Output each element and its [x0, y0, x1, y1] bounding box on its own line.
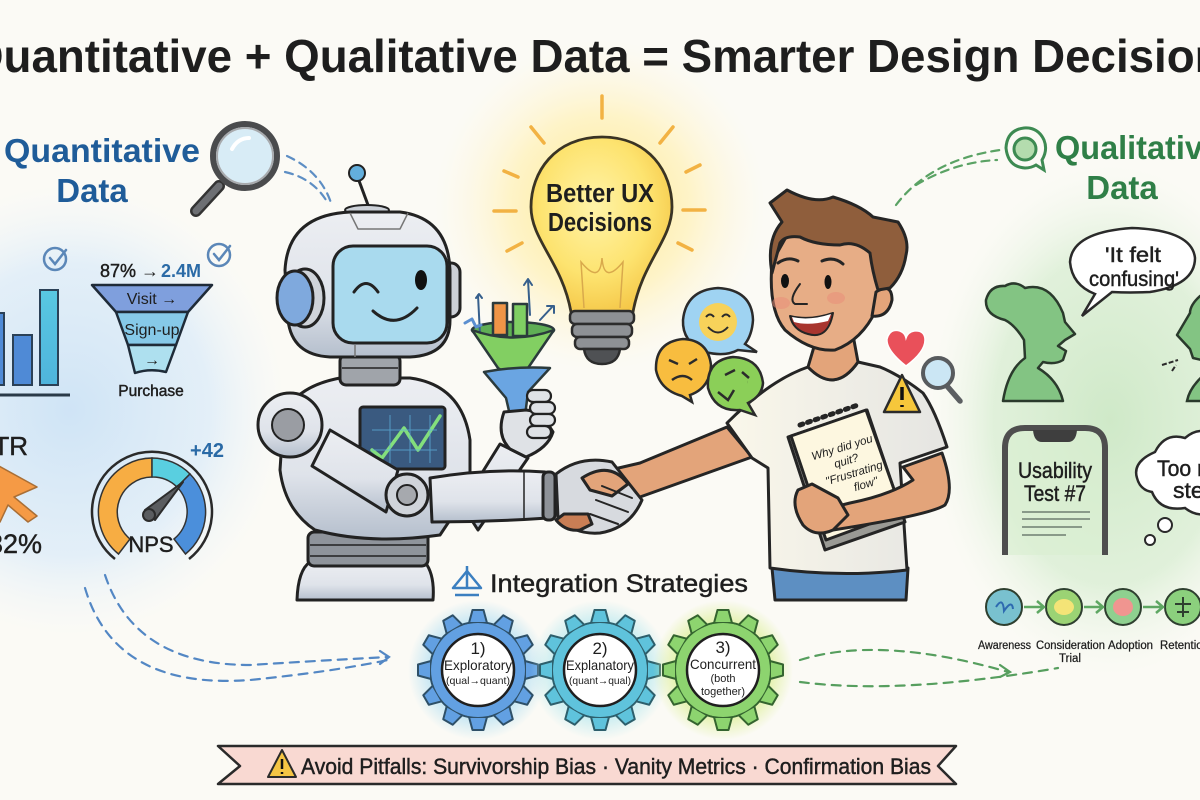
NPS gauge: +42: [190, 440, 224, 462]
icon: heart: [887, 330, 925, 366]
arrow: integration to qualitative: [800, 650, 1058, 686]
robot: [258, 165, 555, 600]
gear 3: concurrent: (both: [710, 673, 736, 685]
phone: usability test: Usability: [1018, 458, 1092, 483]
background glows: [0, 40, 1200, 675]
heading: qualitative data: Data: [1086, 169, 1158, 206]
light bulb: [494, 96, 705, 364]
icon: small magnifier: [923, 358, 960, 401]
heading: quantitative data: Quantitative: [4, 132, 200, 169]
robot face screen: [333, 246, 447, 343]
robot elbow: [386, 474, 428, 516]
silhouette: man shoulder: [1187, 370, 1200, 401]
gear 2: explanatory: (quant→qual): [569, 675, 631, 687]
icon: orange cursor: [0, 460, 37, 522]
bubble: happy: [683, 288, 757, 354]
journey labels: Adoption: [1108, 640, 1153, 652]
thought bubble: too many steps: [1136, 431, 1200, 545]
jeans: [772, 568, 908, 600]
gear 1: exploratory: Exploratory: [444, 657, 512, 673]
NPS gauge: [92, 440, 224, 559]
robot forearm: [430, 471, 555, 522]
heading: qualitative data: [1055, 129, 1200, 206]
speech bubble: it felt confusing: 'It felt: [1105, 244, 1161, 267]
person neck: [808, 335, 858, 380]
bulb label: Decisions: [548, 209, 652, 237]
journey arrows: [1024, 601, 1163, 613]
notebook: [788, 405, 905, 550]
robot gripping hand: [501, 390, 555, 457]
icon: magnifying glass: [196, 124, 277, 211]
banner: avoid pitfalls: [218, 746, 956, 784]
gear 1: exploratory: [408, 600, 548, 740]
journey icons: [986, 589, 1200, 625]
panel: quantitative data: [0, 124, 277, 559]
silhouette: woman: [986, 283, 1075, 401]
handshake: [556, 460, 642, 533]
phone: usability test: [1005, 428, 1105, 555]
journey labels: Consideration: [1036, 640, 1105, 652]
banner: avoid pitfalls: Avoid Pitfalls: Survivorship Bias · Vanity Metrics · Confirmation Bias: [301, 754, 931, 779]
bulb base: [570, 311, 634, 364]
heading: quantitative data: [4, 132, 200, 209]
funnel metric label: 87%: [100, 261, 136, 281]
funnel chart: Visit →: [127, 291, 177, 308]
robot left ear: [277, 269, 324, 327]
gear 2: explanatory: Explanatory: [566, 657, 634, 673]
funnel metric label: 2.4M: [161, 261, 201, 281]
robot lower body: [297, 562, 433, 600]
gear 3: concurrent: together): [701, 686, 745, 698]
funnel label: purchase: Purchase: [118, 383, 184, 400]
speech bubble: it felt confusing: confusing': [1089, 268, 1179, 291]
bulb filament: [581, 258, 623, 308]
robot torso: [280, 378, 470, 539]
robot waist: [308, 532, 428, 566]
heading: integration strategies: Integration Strategies: [490, 570, 748, 598]
person face features: [772, 259, 845, 335]
journey labels: Awareness: [978, 640, 1031, 652]
gear 1: exploratory: (qual→quant): [446, 675, 510, 687]
funnel chart: →: [144, 352, 160, 369]
NPS gauge: NPS: [128, 532, 174, 557]
gear 3: concurrent: Concurrent: [690, 656, 756, 672]
robot upper arm: [312, 430, 398, 512]
blue funnel: [484, 368, 550, 424]
robot antenna: [345, 165, 389, 215]
arrow: magnifier to robot: [285, 156, 332, 206]
person ear: [872, 288, 892, 316]
gear 3: concurrent: 3): [715, 638, 731, 657]
notebook: "Frustrating: [824, 459, 885, 488]
person extended arm: [610, 427, 752, 505]
bulb label: Better UX: [546, 180, 654, 208]
icon: balance: [453, 566, 481, 595]
person head: [771, 230, 880, 350]
person hand on notebook: [795, 484, 848, 533]
gear 2: explanatory: [530, 600, 670, 740]
person: [556, 190, 949, 600]
notebook: Why did you: [810, 433, 875, 463]
robot head: [285, 212, 450, 357]
icon: chat bubble: [1006, 128, 1046, 170]
funnel chart: Sign-up: [124, 322, 180, 339]
bubble: green face: [708, 357, 763, 415]
bulb glass: [531, 137, 672, 312]
bubble: frustrated: [656, 339, 711, 402]
green funnel back rim: [472, 322, 554, 338]
gear 1: exploratory: 1): [470, 639, 486, 658]
phone: usability test: Test #7: [1024, 481, 1086, 506]
person hair: [770, 190, 907, 290]
gear 3: concurrent: [653, 600, 793, 740]
robot chest screen: [360, 407, 445, 469]
t-shirt: [727, 362, 947, 574]
arrow: quantitative to integration: [85, 575, 389, 681]
icon: warning: [268, 750, 296, 777]
icon: check badge left: [44, 248, 66, 270]
panel: qualitative data: [978, 128, 1200, 665]
funnel metric label: →: [141, 261, 159, 281]
speech marks: [1162, 360, 1178, 371]
light rays: [494, 96, 705, 251]
bar chart: [0, 290, 70, 395]
speech bubble: it felt confusing: [1070, 228, 1195, 316]
green funnel cone: [472, 330, 554, 372]
robot back arm: [462, 444, 528, 530]
robot neck: [340, 355, 400, 385]
data bars and arrows: [465, 279, 554, 336]
notebook: quit?: [833, 452, 861, 471]
silhouette: man head: [1177, 292, 1200, 362]
arrow: qualitative heading to person: [896, 150, 1000, 205]
icon: warning triangle: [884, 375, 920, 412]
robot right ear: [442, 263, 460, 317]
funnel metric label: [100, 261, 201, 281]
heading: quantitative data: Data: [56, 172, 128, 209]
person holding arm: [822, 453, 949, 530]
emoji speech bubbles: [656, 288, 763, 415]
funnel chart: [92, 285, 212, 373]
journey labels: Trial: [1059, 653, 1081, 665]
robot shoulder: [258, 393, 322, 457]
user journey: [978, 589, 1200, 665]
bulb label: [546, 180, 654, 237]
notebook: flow": [853, 475, 880, 494]
journey labels: [978, 640, 1200, 665]
icon: check badge right: [208, 244, 230, 266]
funnels held by robot: [465, 279, 554, 424]
gear 2: explanatory: 2): [592, 639, 608, 658]
